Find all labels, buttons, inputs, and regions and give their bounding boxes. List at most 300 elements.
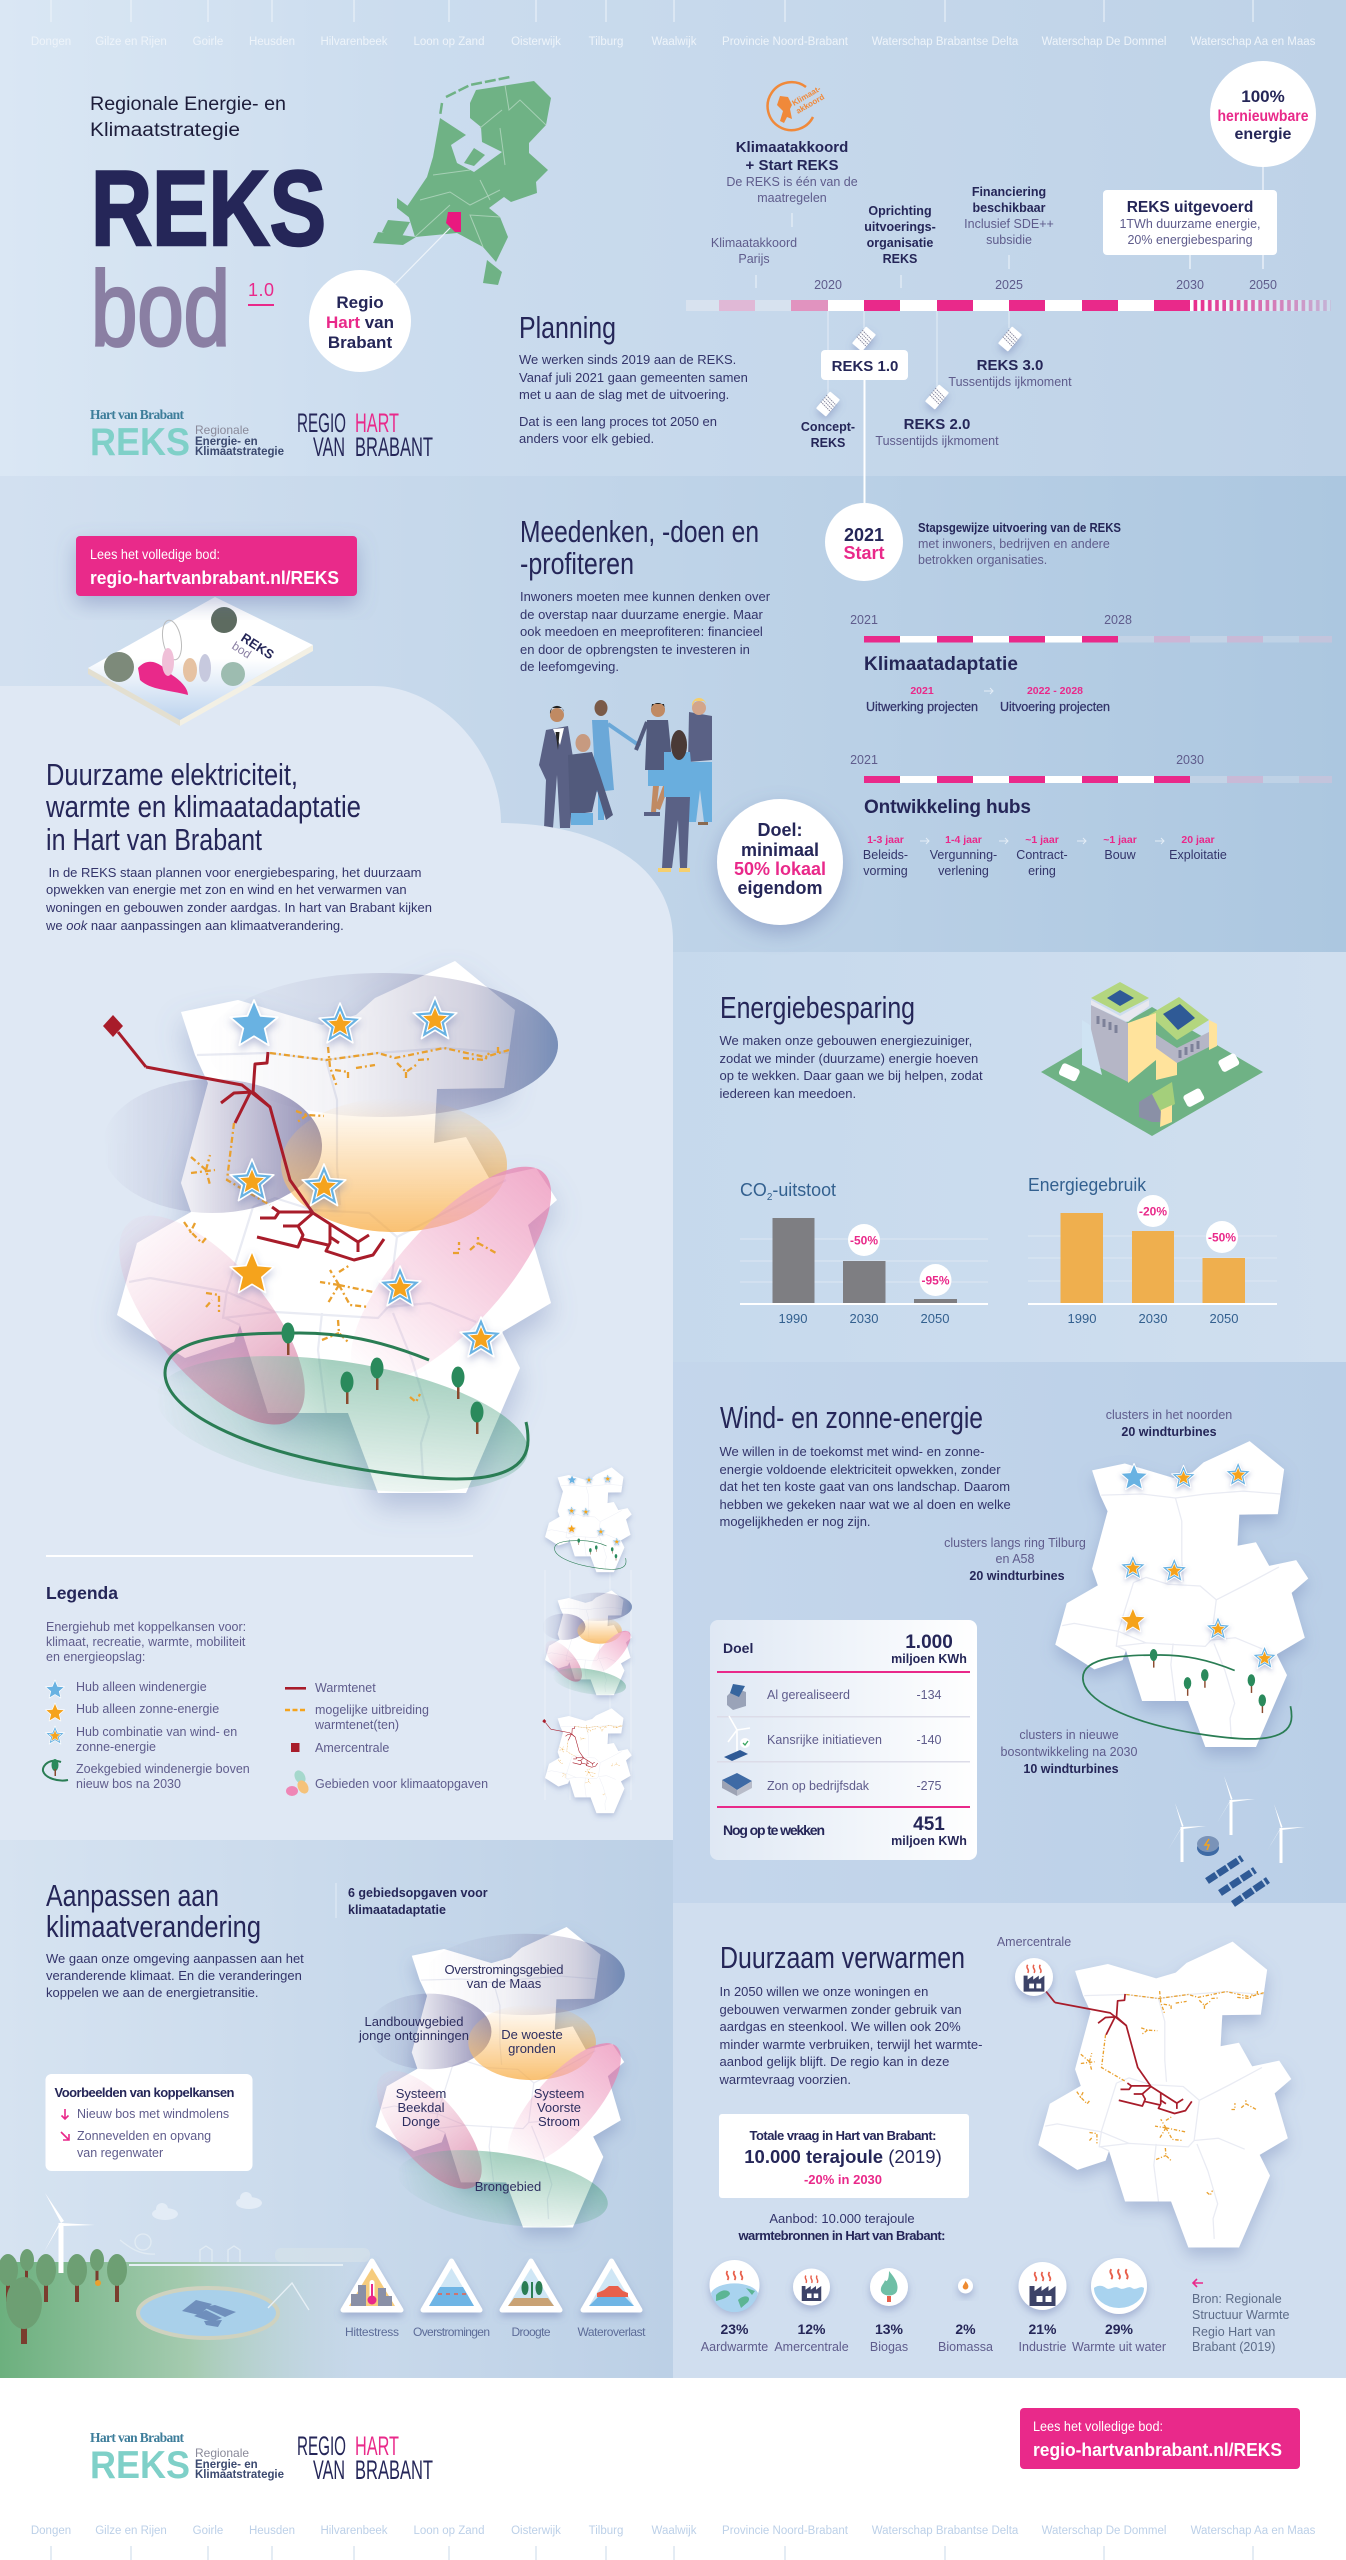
- timeline: klimaatadaptatie: [850, 613, 1332, 714]
- partner names bottom strip: Goirle: [193, 2525, 223, 2537]
- partner names top strip: Tilburg: [589, 36, 623, 48]
- intro text: [45, 865, 432, 933]
- box: totale vraag: [719, 2114, 969, 2198]
- title block: 1.0: [248, 280, 274, 300]
- climate area labels: De woeste: [501, 2027, 563, 2042]
- partner names top strip: Waterschap Aa en Maas: [1191, 36, 1316, 48]
- bar chart: CO2: -uitstoot: [772, 1180, 836, 1200]
- heading and text: veranderende klimaat. En die veranderingen: [46, 1968, 302, 1983]
- climate area labels: Beekdal: [398, 2100, 445, 2115]
- logos header: REKS: [90, 421, 190, 464]
- milestone: uitvoeringsorganisatie: organisatie: [867, 236, 933, 250]
- small map: climate areas: [539, 1590, 637, 1699]
- subheading: 6 gebiedsopgaven: 6 gebiedsopgaven voor: [348, 1886, 488, 1900]
- heading and text: zodat we minder (duurzame) energie hoeven: [720, 1051, 978, 1066]
- logos footer: BRABANT: [355, 2455, 433, 2485]
- logos footer: [90, 2430, 433, 2487]
- bar chart: energiegebruik: -50%: [1208, 1230, 1236, 1244]
- legend: Hub combinatie van wind- en: [76, 1725, 237, 1739]
- legend: nieuw bos na 2030: [76, 1777, 181, 1791]
- panel: planning text: We werken sinds 2019 aan de REKS.: [519, 352, 736, 367]
- milestone: uitvoeringsorganisatie: REKS: [883, 252, 917, 266]
- timeline bar: [686, 300, 1331, 311]
- climate area labels: Overstromingsgebied: [444, 1962, 564, 1977]
- box: REKS uitgevoerd: REKS uitgevoerd: [1127, 199, 1253, 216]
- climate area labels: Landbouwgebied: [364, 2014, 464, 2029]
- legend: [43, 1583, 488, 1796]
- box: voorbeelden van koppelkansen: Nieuw bos met windmolens: [77, 2107, 229, 2121]
- button: lees het volledige bod: Lees het volledige bod:: [90, 547, 220, 562]
- heat source: aardwarmte: Aardwarmte: [701, 2340, 768, 2354]
- partner names bottom strip: Dongen: [31, 2525, 71, 2537]
- subheading: 6 gebiedsopgaven: klimaatadaptatie: [348, 1903, 446, 1917]
- milestone: financiering: Financiering: [972, 185, 1046, 199]
- bar chart: CO2: CO: [740, 1180, 767, 1200]
- search area ring with trees: [165, 1322, 528, 1479]
- heading and text: iedereen kan meedoen.: [720, 1086, 856, 1101]
- heat source: biogas: Biogas: [870, 2340, 908, 2354]
- climate area labels: Voorste: [537, 2100, 581, 2115]
- partner names bottom strip: Tilburg: [589, 2525, 623, 2537]
- year labels: 2025: [995, 278, 1023, 292]
- button: lees het volledige bod: regio-hartvanbrabant.nl/REKS: [90, 567, 339, 588]
- bar chart: CO2: 2030: [850, 1311, 878, 1326]
- source note with arrow: Brabant (2019): [1192, 2340, 1275, 2354]
- warmtenet network: [103, 1015, 509, 1402]
- year labels: 2030: [1176, 278, 1204, 292]
- heat source: biogas: [870, 2268, 908, 2354]
- milestone: financiering: Inclusief SDE++: [964, 217, 1054, 231]
- icon: Klimaatakkoord logo: akkoord: [794, 92, 826, 116]
- timeline: ontwikkeling hubs: 1-4 jaar: [945, 834, 982, 846]
- timeline: klimaatadaptatie: 2021: [850, 613, 878, 627]
- timeline: ontwikkeling hubs: Exploitatie: [1169, 848, 1227, 862]
- logos header: Hart van Brabant: [90, 407, 184, 422]
- heat source: biomassa: 2%: [955, 2321, 976, 2337]
- bar chart: energiegebruik: -20%: [1139, 1204, 1167, 1218]
- timeline: klimaatadaptatie: 2021: [910, 685, 934, 697]
- wind map: [1055, 1441, 1308, 1747]
- icon: Klimaatakkoord logo: Klimaat-: [790, 84, 823, 108]
- partner names bottom strip: Oisterwijk: [511, 2525, 561, 2537]
- panel: aanpassen aan klimaatverandering: [0, 1840, 673, 2378]
- circle: 2021 Start: 2021: [844, 525, 884, 545]
- timeline: ontwikkeling hubs: vorming: [863, 864, 908, 878]
- panel: planning text: [519, 310, 748, 446]
- climate task labels: Wateroverlast: [578, 2325, 646, 2339]
- box: voorbeelden van koppelkansen: van regenwater: [77, 2146, 163, 2160]
- partner names bottom strip: Heusden: [249, 2525, 295, 2537]
- box: voorbeelden van koppelkansen: Zonnevelden en opvang: [77, 2129, 211, 2143]
- partner names top strip: Oisterwijk: [511, 36, 561, 48]
- logos header: Energie- en: [195, 436, 258, 448]
- milestone: financiering: beschikbaar: [973, 201, 1046, 215]
- vans: [1058, 1052, 1240, 1108]
- partner names top strip: Waalwijk: [652, 36, 697, 48]
- milestone: Klimaatakkoord + Start REKS: + Start REKS: [746, 157, 838, 174]
- icon: wateroverlast: [583, 2261, 640, 2310]
- cluster labels: en A58: [996, 1552, 1035, 1566]
- panel: meedenken text: en door de opbrengsten te investeren in: [520, 642, 750, 657]
- legend: Energiehub met koppelkansen voor:: [46, 1620, 246, 1634]
- aanbod text: Aanbod: 10.000 terajoule: [769, 2211, 915, 2226]
- partner names top strip: Hilvarenbeek: [320, 36, 388, 48]
- heading and text: Energiebesparing: [720, 990, 915, 1025]
- intro text: In de REKS staan plannen voor energiebesparing, het duurzaam: [48, 865, 421, 880]
- climate area labels: Donge: [402, 2114, 440, 2129]
- report book: [88, 597, 313, 726]
- logos footer: Hart van Brabant: [90, 2430, 184, 2445]
- milestone: uitvoeringsorganisatie: [864, 204, 936, 288]
- heading and text: op te wekken. Daar gaan we bij helpen, zodat: [720, 1068, 983, 1083]
- heat source: warmte uit water: [1072, 2258, 1166, 2354]
- partner names top strip: Waterschap Brabantse Delta: [872, 36, 1019, 48]
- clouds: [152, 2192, 262, 2220]
- heat source: amercentrale: [774, 2268, 849, 2354]
- panel: meedenken text: ook meedoen en meeprofiteren: financieel: [520, 624, 763, 639]
- circle: 2021 Start: Start: [843, 543, 885, 563]
- illustration: group of people: [539, 698, 712, 872]
- text: stapsgewijze uitvoering: [918, 521, 1121, 567]
- legend: en energieopslag:: [46, 1650, 145, 1664]
- logos footer: REGIO: [297, 2431, 346, 2461]
- box: totale vraag: Totale vraag in Hart van Brabant:: [750, 2128, 936, 2143]
- climate map: [358, 1927, 638, 2240]
- intro text: we ook naar aanpassingen aan klimaatverandering.: [45, 918, 344, 933]
- cluster labels: clusters in nieuwe: [1019, 1728, 1119, 1742]
- milestone: financiering: subsidie: [986, 233, 1032, 247]
- logos footer: HART: [355, 2431, 399, 2461]
- heading and text: klimaatverandering: [46, 1909, 261, 1944]
- button: lees het volledige bod: [76, 536, 357, 596]
- timeline: ontwikkeling hubs: Contract-: [1016, 848, 1068, 862]
- legend: Gebieden voor klimaatopgaven: [315, 1777, 488, 1791]
- logos header: [90, 407, 433, 464]
- callout: Regio Hart van Brabant: Regio: [336, 293, 384, 312]
- icon: house with solar: [727, 1684, 746, 1710]
- heading and text: mogelijkheden er nog zijn.: [720, 1514, 871, 1529]
- cluster labels: bosontwikkeling na 2030: [1001, 1745, 1137, 1759]
- bar chart: CO2: [740, 1180, 988, 1326]
- panel: planning text: Dat is een lang proces tot 2050 en: [519, 414, 717, 429]
- bar chart: CO2: -50%: [850, 1234, 878, 1248]
- milestone: Klimaatakkoord Parijs: Parijs: [738, 252, 770, 266]
- text: stapsgewijze uitvoering: betrokken organisaties.: [918, 553, 1047, 567]
- climate area labels: Stroom: [538, 2114, 580, 2129]
- hub stars: [230, 997, 502, 1357]
- logos footer: VAN: [313, 2455, 345, 2485]
- legend: klimaat, recreatie, warmte, mobiliteit: [46, 1635, 246, 1649]
- legend: Hub alleen zonne-energie: [76, 1702, 219, 1716]
- timeline: ontwikkeling hubs: ering: [1028, 864, 1056, 878]
- milestone: REKS 2.0: REKS 2.0: [904, 416, 970, 433]
- intro text: woningen en gebouwen zonder aardgas. In hart van Brabant kijken: [45, 900, 432, 915]
- logos footer: Klimaatstrategie: [195, 2469, 284, 2481]
- milestone: Klimaatakkoord + Start REKS: De REKS is één van de: [726, 175, 858, 189]
- timeline: ontwikkeling hubs: 20 jaar: [1181, 834, 1215, 846]
- climate area labels: [358, 1962, 584, 2194]
- timeline: ontwikkeling hubs: Beleids-: [863, 848, 908, 862]
- climate area labels: jonge ontginningen: [358, 2028, 469, 2043]
- logos header: HART: [355, 408, 399, 438]
- climate area labels: Systeem: [534, 2086, 584, 2101]
- climate task labels: Overstromingen: [413, 2325, 490, 2339]
- panel: planning text: met u aan de slag met de uitvoering.: [519, 387, 729, 402]
- text: stapsgewijze uitvoering: met inwoners, bedrijven en andere: [918, 537, 1110, 551]
- logos header: VAN: [313, 432, 345, 462]
- milestone: REKS 2.0: Tussentijds ijkmoment: [875, 434, 999, 448]
- table: doel en opgave: Nog op te wekken: [723, 1822, 825, 1838]
- table: doel en opgave: Kansrijke initiatieven: [767, 1733, 882, 1747]
- button footer: lees het volledige bod: Lees het volledige bod:: [1033, 2419, 1163, 2434]
- circle: doel 50% lokaal eigendom: [717, 799, 843, 925]
- table: doel en opgave: [710, 1620, 977, 1860]
- source note with arrow: Structuur Warmte: [1192, 2308, 1290, 2322]
- source note with arrow: Regio Hart van: [1192, 2325, 1275, 2339]
- cluster labels: clusters langs ring Tilburg: [944, 1536, 1086, 1550]
- report book: bod: [229, 639, 254, 661]
- bar chart: CO2: -95%: [921, 1274, 950, 1288]
- source note with arrow: Bron: Regionale: [1192, 2292, 1282, 2306]
- timeline: ontwikkeling hubs: ~1 jaar: [1103, 834, 1137, 846]
- heading and text: aardgas en steenkool. We willen ook 20%: [720, 2019, 961, 2034]
- table: doel en opgave: Doel: [723, 1640, 753, 1656]
- milestone: uitvoeringsorganisatie: uitvoerings-: [864, 220, 936, 234]
- heading and text: hebben we gekeken naar wat we al doen en welke: [720, 1497, 1011, 1512]
- partner names top strip: Dongen: [31, 36, 71, 48]
- heading and text: [720, 1400, 1011, 1529]
- circle: doel 50% lokaal eigendom: 50% lokaal: [734, 859, 826, 879]
- heat source: aardwarmte: 23%: [720, 2321, 749, 2337]
- circle: doel 50% lokaal eigendom: Doel:: [758, 820, 802, 840]
- panel: planning text: anders voor elk gebied.: [519, 431, 654, 446]
- heat source: industrie: [1018, 2262, 1067, 2354]
- bar chart: energiegebruik: 2050: [1210, 1311, 1238, 1326]
- legend: warmtenet(ten): [314, 1718, 399, 1732]
- timeline: ontwikkeling hubs: Ontwikkeling hubs: [864, 797, 1031, 818]
- logos header: BRABANT: [355, 432, 433, 462]
- partner names bottom strip: [31, 2525, 1316, 2560]
- year labels: 2020: [814, 278, 842, 292]
- callout: Regio Hart van Brabant: [309, 270, 411, 372]
- climate task labels: Hittestress: [345, 2325, 399, 2339]
- heading and text: Duurzaam verwarmen: [720, 1940, 965, 1975]
- legend: Legenda: [46, 1583, 118, 1603]
- icon: turbine and panels: [724, 1716, 750, 1761]
- panel: meedenken text: Meedenken, -doen en: [520, 514, 759, 549]
- table: doel en opgave: 1.000: [905, 1632, 953, 1653]
- heat source: biogas: 13%: [875, 2321, 904, 2337]
- climate area labels: van de Maas: [467, 1976, 542, 1991]
- timeline: ontwikkeling hubs: ~1 jaar: [1025, 834, 1059, 846]
- box: REKS uitgevoerd: [1103, 190, 1277, 255]
- partner names top strip: Heusden: [249, 36, 295, 48]
- legend: mogelijke uitbreiding: [315, 1703, 429, 1717]
- title block: REKS: [91, 148, 326, 268]
- heading: in Hart van Brabant: [46, 822, 262, 857]
- milestone: Klimaatakkoord + Start REKS: [726, 139, 858, 227]
- callout: Regio Hart van Brabant: Hart van: [326, 313, 394, 332]
- button footer: lees het volledige bod: regio-hartvanbrabant.nl/REKS: [1033, 2439, 1282, 2460]
- box: REKS 1.0: [821, 350, 908, 380]
- table: doel en opgave: -140: [916, 1733, 942, 1747]
- panel: meedenken text: de overstap naar duurzame energie. Maar: [520, 607, 763, 622]
- aanbod text: warmtebronnen in Hart van Brabant:: [738, 2228, 946, 2243]
- heading: Duurzame elektriciteit,: [46, 757, 298, 792]
- heading and text: [46, 1878, 304, 2000]
- heading and text: [720, 990, 983, 1101]
- year labels: 2050: [1249, 278, 1277, 292]
- small map: warmtenet: [542, 1708, 632, 1813]
- heat source: biomassa: [938, 2278, 993, 2354]
- text: stapsgewijze uitvoering: Stapsgewijze uitvoering van de REKS: [918, 521, 1121, 535]
- timeline: ontwikkeling hubs: 2030: [1176, 753, 1204, 767]
- bar chart: energiegebruik: 2030: [1139, 1311, 1167, 1326]
- year labels: [814, 278, 1277, 292]
- bar chart: CO2: 2: [767, 1192, 773, 1203]
- heading and text: We maken onze gebouwen energiezuiniger,: [720, 1033, 972, 1048]
- heat source: amercentrale: Amercentrale: [774, 2340, 849, 2354]
- heading and text: warmtevraag voorzien.: [718, 2072, 851, 2087]
- cluster labels: 20 windturbines: [969, 1569, 1065, 1583]
- logos header: Klimaatstrategie: [195, 446, 284, 458]
- timeline: ontwikkeling hubs: 1-3 jaar: [867, 834, 904, 846]
- milestone: REKS 3.0: Tussentijds ijkmoment: [948, 375, 1072, 389]
- milestone: REKS 3.0: REKS 3.0: [977, 357, 1043, 374]
- icon: hittestress: [343, 2261, 401, 2310]
- circle: doel 50% lokaal eigendom: eigendom: [737, 878, 823, 898]
- title block: Klimaatstrategie: [90, 120, 240, 141]
- milestone: REKS 2.0: [875, 416, 999, 448]
- milestone: Concept-REKS: [801, 420, 855, 450]
- box: totale vraag: -20% in 2030: [804, 2172, 882, 2187]
- heading: [45, 757, 361, 857]
- panel: duurzaam verwarmen: [701, 1935, 1291, 2354]
- milestone: Concept-REKS: REKS: [811, 436, 845, 450]
- box: REKS 1.0: REKS 1.0: [832, 358, 898, 375]
- panel: energiebesparing: [720, 982, 1277, 1326]
- legend: Zoekgebied windenergie boven: [76, 1762, 250, 1776]
- heading and text: Wind- en zonne-energie: [720, 1400, 983, 1435]
- climate task labels: Droogte: [512, 2325, 551, 2339]
- bar chart: energiegebruik: [1028, 1175, 1277, 1326]
- circle: 100% hernieuwbare energie: 100%: [1241, 87, 1285, 106]
- table: doel en opgave: -134: [916, 1688, 942, 1702]
- report book: REKS: [238, 630, 277, 662]
- panel: meedenken text: [520, 514, 771, 674]
- table: doel en opgave: miljoen KWh: [891, 1834, 967, 1848]
- heading and text: [718, 1940, 982, 2087]
- timeline: klimaatadaptatie: 2028: [1104, 613, 1132, 627]
- callout: Regio Hart van Brabant: Brabant: [328, 333, 392, 352]
- milestone: uitvoeringsorganisatie: Oprichting: [868, 204, 932, 218]
- circle: 100% hernieuwbare energie: energie: [1235, 126, 1292, 143]
- heat source: warmte uit water: Warmte uit water: [1072, 2340, 1166, 2354]
- timeline: klimaatadaptatie: Klimaatadaptatie: [864, 654, 1018, 675]
- icon: Klimaatakkoord logo: [768, 82, 826, 130]
- circle: 100% hernieuwbare energie: hernieuwbare: [1218, 108, 1309, 125]
- climate area labels: Systeem: [396, 2086, 446, 2101]
- Amercentrale marker: [997, 1935, 1071, 1996]
- partner names bottom strip: Waterschap De Dommel: [1042, 2525, 1166, 2537]
- aanbod text: [738, 2211, 946, 2243]
- box: REKS uitgevoerd: 1TWh duurzame energie,: [1119, 217, 1261, 231]
- logos footer: REKS: [90, 2444, 190, 2487]
- circle: 2021 Start: [825, 503, 903, 581]
- partner names top strip: Loon op Zand: [414, 36, 484, 48]
- map of the Netherlands: [373, 77, 551, 285]
- logos header: Regionale: [195, 423, 249, 437]
- milestone: financiering: [964, 185, 1054, 269]
- title block: bod: [91, 250, 230, 368]
- circle: 100% hernieuwbare energie: [1210, 61, 1316, 167]
- timeline: ontwikkeling hubs: Vergunning-: [930, 848, 997, 862]
- illustration: wind turbines and solar panels: [1168, 1776, 1305, 1904]
- icon: company roof: [722, 1773, 752, 1796]
- trees: [0, 2249, 127, 2344]
- heading and text: gebouwen verwarmen zonder gebruik van: [720, 2002, 962, 2017]
- partner names bottom strip: Loon op Zand: [414, 2525, 484, 2537]
- timeline: klimaatadaptatie: Uitwerking projecten: [866, 700, 978, 714]
- partner names bottom strip: Waalwijk: [652, 2525, 697, 2537]
- landscape illustration: [0, 2192, 380, 2378]
- partner names top strip: Waterschap De Dommel: [1042, 36, 1166, 48]
- partner names bottom strip: Waterschap Aa en Maas: [1191, 2525, 1316, 2537]
- timeline: klimaatadaptatie: Uitvoering projecten: [1000, 700, 1110, 714]
- connector lines: [828, 167, 1263, 395]
- climate area labels: gronden: [508, 2041, 556, 2056]
- cluster labels: 10 windturbines: [1023, 1762, 1119, 1776]
- table: doel en opgave: Al gerealiseerd: [767, 1688, 850, 1702]
- legend: zonne-energie: [76, 1740, 156, 1754]
- timeline: ontwikkeling hubs: verlening: [938, 864, 989, 878]
- logos footer: Regionale: [195, 2446, 249, 2460]
- milestone: Klimaatakkoord + Start REKS: Klimaatakkoord: [736, 139, 848, 156]
- heat network map: [1038, 1942, 1291, 2247]
- partner names bottom strip: Gilze en Rijen: [95, 2525, 167, 2537]
- connector to 2021 start: [864, 380, 866, 504]
- box: totale vraag: 10.000 terajoule (2019): [744, 2146, 942, 2167]
- heading: warmte en klimaatadaptatie: [45, 789, 361, 824]
- bar chart: energiegebruik: 1990: [1068, 1311, 1096, 1326]
- partner names top strip: Goirle: [193, 36, 223, 48]
- panel: wind- en zonne-energie: [710, 1400, 1308, 1904]
- climate area labels: Brongebied: [475, 2179, 541, 2194]
- main map: hubs, warmtenet and climate areas: [87, 961, 582, 1515]
- legend: Warmtenet: [315, 1681, 376, 1695]
- timeline: ontwikkeling hubs: [850, 753, 1332, 878]
- table: doel en opgave: Zon op bedrijfsdak: [767, 1779, 870, 1793]
- milestone: Klimaatakkoord Parijs: [711, 236, 797, 288]
- Amercentrale marker: Amercentrale: [997, 1935, 1071, 1949]
- partner names top strip: Gilze en Rijen: [95, 36, 167, 48]
- heat source: warmte uit water: 29%: [1105, 2321, 1134, 2337]
- panel: planning text: Planning: [519, 310, 616, 345]
- heading and text: minder warmte verbruiken, terwijl het warmte-: [720, 2037, 982, 2052]
- panel: meedenken text: -profiteren: [520, 546, 634, 581]
- small map: hubs: [545, 1467, 632, 1572]
- subheading: 6 gebiedsopgaven: [336, 1883, 488, 1918]
- heading and text: dat het ten koste gaat van ons landschap. Daarom: [720, 1479, 1010, 1494]
- partner names bottom strip: Provincie Noord-Brabant: [722, 2525, 849, 2537]
- timeline: planning: [686, 61, 1331, 450]
- partner names top strip: [31, 0, 1316, 48]
- timeline: ontwikkeling hubs: Bouw: [1104, 848, 1137, 862]
- bar chart: energiegebruik: Energiegebruik: [1028, 1175, 1147, 1195]
- panel: duurzame elektriciteit, warmte en klimaatadaptatie: [0, 686, 673, 1840]
- table: doel en opgave: 451: [913, 1814, 945, 1835]
- logos header: REGIO: [297, 408, 346, 438]
